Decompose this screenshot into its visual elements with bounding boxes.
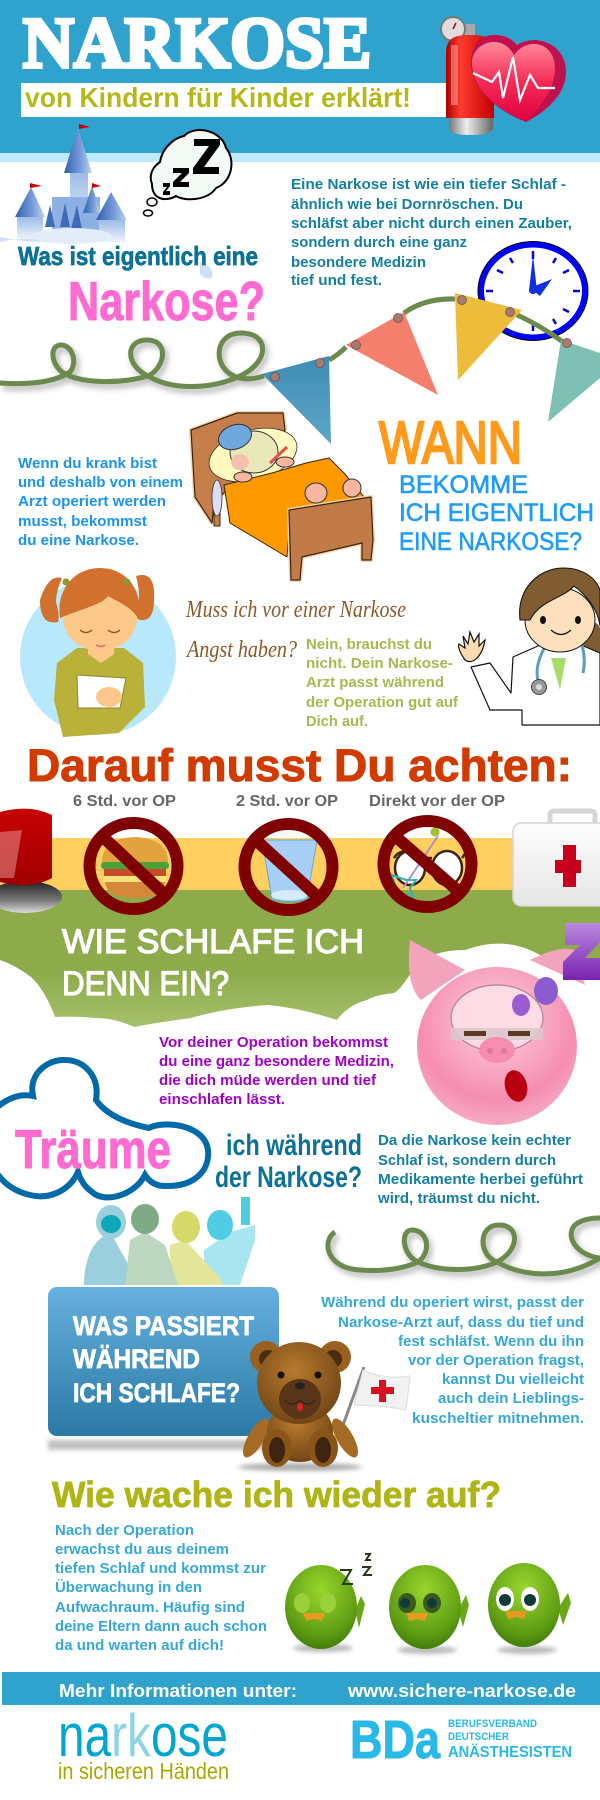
- dream cloud with Träume: [0, 1060, 208, 1197]
- logo: narkose in sicheren Händen: in sicheren Händen: [58, 1758, 229, 1784]
- footer info bar: www.sichere-narkose.de: [347, 1680, 576, 1701]
- logo: BDA: DEUTSCHER: [448, 1731, 509, 1743]
- flag: blue: [262, 356, 331, 444]
- illustration: sleeping bird: [285, 1554, 372, 1652]
- text block: no dreaming: wird, träumst du nicht.: [377, 1191, 540, 1207]
- text block: no need to fear: Nein, brauchst du: [306, 637, 432, 653]
- text block: during surgery: kuscheltier mitnehmen.: [412, 1411, 584, 1427]
- text block: what is anaesthesia: Eine Narkose ist wie ein tiefer Schlaf -: [291, 177, 566, 193]
- text block: waking up: da und warten auf dich!: [55, 1638, 224, 1654]
- header band: [0, 0, 600, 162]
- illustration: sleepy pink pig: [409, 923, 600, 1125]
- text block: no dreaming: Medikamente herbei geführt: [378, 1172, 583, 1188]
- rules band: yellow and green cloud panel: [0, 838, 600, 1027]
- text block: no need to fear: Dich auf.: [306, 714, 368, 730]
- column labels: [73, 793, 505, 810]
- icon: castle: [0, 124, 212, 278]
- text block: during surgery: kannst Du vielleicht: [442, 1372, 584, 1388]
- text block: waking up: Aufwachraum. Häufig sind: [55, 1600, 245, 1616]
- column labels: Direkt vor der OP: [369, 793, 505, 810]
- text block: what is anaesthesia: tief und fest.: [291, 273, 382, 289]
- text block: waking up: deine Eltern dann auch schon: [55, 1619, 267, 1635]
- no-sign: burger: [90, 823, 178, 909]
- text block: waking up: [55, 1523, 267, 1654]
- heading: bekomme ich eigentlich eine Narkose: BEKOMME: [399, 471, 528, 499]
- illustration: girl: [20, 568, 176, 737]
- text block: when anaesthesia: musst, bekommst: [18, 514, 147, 530]
- illustration: teddy bear with flag: [238, 1341, 410, 1471]
- heading: ich während der Narkose: [215, 1129, 362, 1194]
- flag grommets: [270, 296, 572, 382]
- heading: ich während der Narkose: ich während: [226, 1129, 362, 1162]
- text block: medicine: du eine ganz besondere Medizin,: [159, 1054, 394, 1070]
- footer info bar: [2, 1672, 600, 1705]
- footer info bar: Mehr Informationen unter:: [59, 1680, 297, 1701]
- text block: when anaesthesia: und deshalb von einem: [18, 475, 183, 491]
- text block: when anaesthesia: Arzt operiert werden: [18, 494, 166, 510]
- text block: no dreaming: [377, 1133, 583, 1207]
- text block: waking up: Nach der Operation: [55, 1523, 194, 1539]
- flag: salmon: [346, 312, 438, 395]
- heading: Narkose?: Narkose?: [68, 270, 265, 332]
- text block: no need to fear: nicht. Dein Narkose-: [306, 656, 453, 672]
- logo: BDA: ANÄSTHESISTEN: [448, 1744, 572, 1761]
- icon: clock: [478, 242, 588, 340]
- panel: what happens box: WÄHREND: [73, 1344, 200, 1374]
- dream cloud with Träume: Träume: [15, 1118, 171, 1180]
- logo: narkose in sicheren Händen: narkose: [58, 1702, 228, 1769]
- text block: during surgery: Narkose-Arzt auf, dass du tief und: [338, 1315, 584, 1331]
- text block: waking up: erwachst du aus deinem: [55, 1542, 229, 1558]
- title: NARKOSE: [23, 3, 371, 83]
- column labels: 6 Std. vor OP: [73, 793, 176, 810]
- text block: when anaesthesia: du eine Narkose.: [18, 533, 139, 549]
- text block: what is anaesthesia: ähnlich wie bei Dornröschen. Du: [291, 197, 523, 213]
- text block: what is anaesthesia: sondern durch eine ganz: [291, 235, 467, 251]
- no-sign: glasses and jewellery: [384, 821, 472, 907]
- heading: Wie schlafe ich denn ein: WIE SCHLAFE ICH: [62, 923, 364, 961]
- icon: first aid kit: [513, 811, 600, 906]
- flag: teal: [548, 340, 600, 422]
- text block: during surgery: auch dein Lieblings-: [438, 1391, 584, 1407]
- text block: medicine: die dich müde werden und tief: [159, 1073, 376, 1089]
- decorative rope right: [328, 1218, 600, 1278]
- logo: BDA: BDa: [350, 1710, 441, 1770]
- garland: rope and flags: [0, 293, 600, 444]
- illustration: doctor: [459, 568, 600, 725]
- text block: waking up: tiefen Schlaf und kommst zur: [55, 1561, 266, 1577]
- heading: Wie wache ich wieder auf: Wie wache ich wieder auf?: [52, 1474, 501, 1515]
- illustration: awake bird: [488, 1563, 571, 1654]
- text block: during surgery: fest schläfst. Wenn du ihn: [398, 1334, 584, 1350]
- logo: BDA: BERUFSVERBAND: [448, 1718, 537, 1730]
- text block: no need to fear: Arzt passt während: [306, 675, 444, 691]
- icon: sleep thought bubble: [144, 130, 231, 216]
- heading: ich während der Narkose: der Narkose?: [215, 1161, 362, 1194]
- heading: Muss ich vor einer Narkose: Muss ich vor einer Narkose: [185, 597, 406, 623]
- text block: medicine: [159, 1035, 394, 1108]
- text block: during surgery: vor der Operation fragst,: [408, 1353, 584, 1369]
- text block: what is anaesthesia: schläfst aber nicht durch einen Zauber,: [291, 216, 572, 232]
- text block: during surgery: [321, 1295, 584, 1427]
- heading: bekomme ich eigentlich eine Narkose: EINE NARKOSE?: [399, 528, 582, 556]
- column labels: 2 Std. vor OP: [236, 793, 338, 810]
- panel: what happens box: ICH SCHLAFE?: [73, 1378, 240, 1408]
- no-sign: water glass: [244, 824, 332, 910]
- icon: gas tank and heart: [441, 17, 566, 135]
- panel: what happens box: [48, 1287, 279, 1450]
- heading: Angst haben?: Angst haben?: [185, 637, 297, 663]
- text block: medicine: einschlafen lässt.: [159, 1092, 285, 1108]
- heading: Wie schlafe ich denn ein: [62, 923, 364, 1003]
- text block: no need to fear: der Operation gut auf: [306, 695, 458, 711]
- subtitle bar: von Kindern für Kinder erklärt!: [25, 82, 411, 113]
- icon: red siren: [0, 809, 62, 913]
- text block: when anaesthesia: [18, 456, 183, 549]
- heading: bekomme ich eigentlich eine Narkose: ICH EIGENTLICH: [399, 499, 594, 527]
- text block: medicine: Vor deiner Operation bekommst: [159, 1035, 388, 1051]
- heading: Darauf musst Du achten: Darauf musst Du achten:: [27, 740, 572, 791]
- illustration: waking bird: [389, 1565, 469, 1654]
- text block: no dreaming: Da die Narkose kein echter: [378, 1133, 571, 1149]
- heading: WANN: WANN: [379, 410, 522, 476]
- panel: what happens box: WAS PASSIERT: [73, 1311, 254, 1341]
- heading: Wie schlafe ich denn ein: DENN EIN?: [62, 965, 229, 1003]
- illustration: medical team: [84, 1197, 255, 1285]
- text block: when anaesthesia: Wenn du krank bist: [18, 456, 157, 472]
- illustration: sick child in bed: [191, 413, 373, 580]
- text block: no need to fear: [306, 637, 458, 730]
- text block: what is anaesthesia: [291, 177, 572, 289]
- heading: was ist eigentlich eine: Was ist eigentlich eine: [18, 241, 258, 271]
- heading: bekomme ich eigentlich eine Narkose: [399, 471, 594, 556]
- text block: during surgery: Während du operiert wirst, passt der: [321, 1295, 584, 1311]
- text block: waking up: Überwachung in den: [55, 1579, 202, 1596]
- text block: what is anaesthesia: besondere Medizin: [291, 255, 426, 271]
- logo: BDA: [350, 1710, 572, 1770]
- text block: no dreaming: Schlaf ist, sondern durch: [378, 1153, 556, 1169]
- flag: yellow: [455, 293, 522, 380]
